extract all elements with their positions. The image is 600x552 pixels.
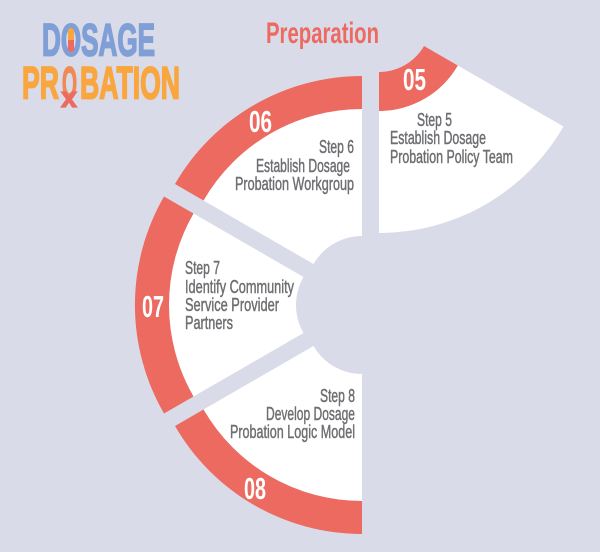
sector band bbox=[175, 76, 362, 200]
step 5 text: Establish Dosage bbox=[390, 128, 486, 148]
logo: Dosage Probation Rx bbox=[22, 14, 180, 114]
step 7 text: Step 7 bbox=[185, 258, 220, 278]
step 7 text: Partners bbox=[185, 313, 233, 333]
logo: small x of Rx: x bbox=[61, 82, 77, 114]
number 05: 05 bbox=[403, 62, 426, 97]
step 6 text bbox=[235, 137, 354, 194]
panel: step 7 bbox=[135, 196, 304, 414]
step 8 text: Probation Logic Model bbox=[230, 422, 355, 442]
panel: step 8 bbox=[175, 346, 362, 534]
step 6 text: Probation Workgroup bbox=[235, 174, 354, 194]
step 7 text bbox=[185, 258, 294, 333]
step 6 text: Establish Dosage bbox=[256, 156, 350, 176]
logo word: DOSAGE: DOSAGE bbox=[42, 14, 155, 66]
icon: capsule in the letter O bbox=[68, 28, 74, 52]
logo word: PROBATION bbox=[22, 58, 180, 108]
number 06: 06 bbox=[249, 104, 272, 139]
sector band bbox=[135, 196, 194, 414]
step 8 text: Step 8 bbox=[320, 386, 355, 406]
number 07: 07 bbox=[142, 289, 164, 324]
step 8 text bbox=[230, 386, 355, 442]
logo word: PROBATION: BATION bbox=[80, 58, 180, 108]
sector body bbox=[204, 109, 362, 264]
title: Preparation bbox=[266, 17, 379, 50]
step 8 text: Develop Dosage bbox=[266, 404, 355, 424]
step 5 text bbox=[390, 110, 513, 167]
step 5 text: Probation Policy Team bbox=[390, 147, 513, 167]
step 5 text: Step 5 bbox=[417, 110, 452, 130]
sector body bbox=[379, 66, 564, 233]
logo word: PROBATION: O bbox=[62, 58, 77, 108]
sector body bbox=[204, 346, 362, 501]
sector body bbox=[169, 214, 304, 396]
logo word: PROBATION: PR bbox=[22, 58, 59, 108]
panel: step 5 bbox=[379, 46, 564, 233]
number 08: 08 bbox=[244, 471, 266, 506]
sector band bbox=[379, 46, 458, 111]
panel: step 6 bbox=[175, 76, 362, 264]
step 6 text: Step 6 bbox=[319, 137, 354, 157]
sector band bbox=[175, 410, 362, 534]
step 7 text: Service Provider bbox=[185, 295, 279, 315]
step 7 text: Identify Community bbox=[185, 277, 294, 297]
